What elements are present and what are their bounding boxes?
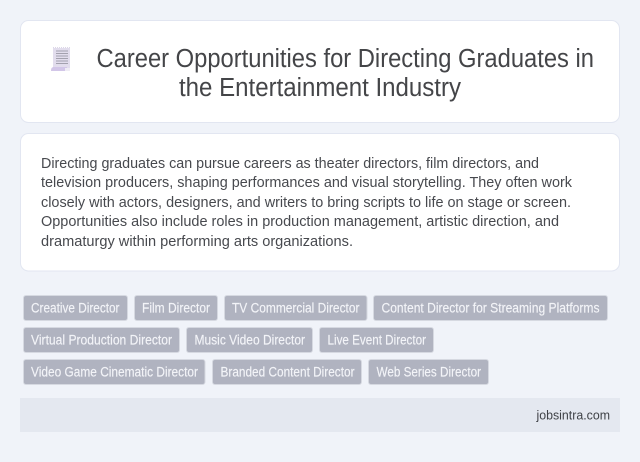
text block: description: closely with actors, designers, and writers to bring scripts to life on stage or screen. (41, 195, 571, 211)
tag: Creative Director: Creative Director (31, 300, 120, 316)
tag: Content Director for Streaming Platforms: Content Director for Streaming Platforms (382, 300, 600, 316)
title: the Entertainment Industry (179, 74, 461, 102)
tag: Virtual Production Director: Virtual Production Director (31, 332, 172, 348)
tag: Live Event Director (320, 328, 434, 352)
panel: header (20, 20, 620, 122)
tag: Film Director: Film Director (142, 300, 210, 316)
tag: TV Commercial Director (224, 296, 367, 320)
tag: Live Event Director: Live Event Director (328, 332, 426, 348)
title (96, 45, 594, 102)
tag: Creative Director (24, 296, 128, 320)
tag: Music Video Director: Music Video Director (194, 332, 305, 348)
text block: description: television producers, shaping performances and visual storytelling. They often work (41, 175, 573, 191)
tag: Music Video Director (186, 328, 312, 352)
text block: description (41, 156, 573, 250)
text block: description: dramaturgy within performing arts organizations. (41, 234, 353, 250)
tag: Branded Content Director: Branded Content Director (220, 364, 355, 380)
tag list (24, 296, 608, 384)
footer text: jobsintra.com (536, 408, 610, 422)
panel: description (20, 134, 620, 271)
tag: Film Director (134, 296, 218, 320)
tag: TV Commercial Director: TV Commercial Director (232, 300, 360, 316)
icon: script document (51, 48, 70, 71)
text block: description: Directing graduates can pursue careers as theater directors, film directors, and (41, 156, 539, 172)
text block: description: Opportunities also include roles in production management, artistic direction, and (41, 214, 559, 230)
tag: Video Game Cinematic Director (24, 360, 205, 384)
tag: Video Game Cinematic Director: Video Game Cinematic Director (31, 364, 198, 380)
tag: Branded Content Director (212, 360, 362, 384)
tag: Web Series Director (368, 360, 488, 384)
tag: Virtual Production Director (24, 328, 180, 352)
footer (20, 398, 620, 432)
title: Career Opportunities for Directing Graduates in (96, 45, 594, 73)
tag: Web Series Director: Web Series Director (376, 364, 481, 380)
tag: Content Director for Streaming Platforms (374, 296, 608, 320)
